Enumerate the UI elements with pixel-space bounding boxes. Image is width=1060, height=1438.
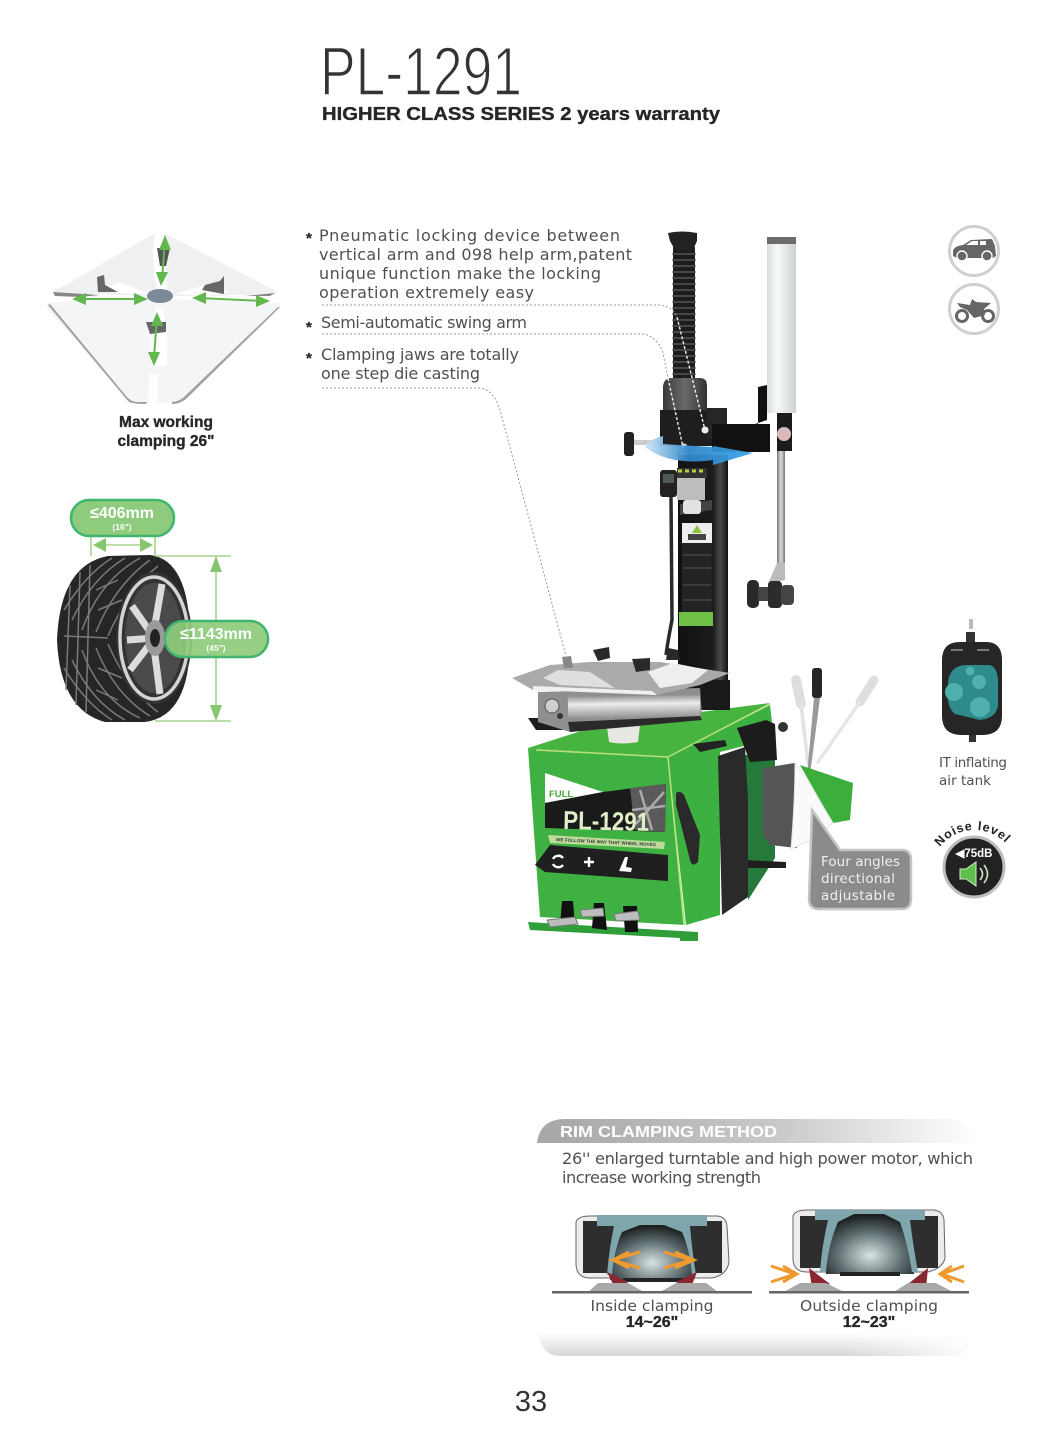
panel: tyre size — [57, 500, 268, 722]
callout: four angles: Four angles — [821, 854, 900, 870]
vertical column — [678, 455, 728, 695]
control panel — [535, 845, 668, 881]
callout: four angles: directional — [821, 871, 895, 887]
feature 2: Semi-automatic swing arm — [321, 313, 527, 332]
feature 3: * — [306, 350, 312, 367]
tank caption: IT inflating — [939, 755, 1007, 771]
panel: max working clamping turntable — [47, 228, 280, 450]
panel header: RIM CLAMPING METHOD — [560, 1124, 777, 1141]
icon: noise level: ◀75dB — [955, 848, 992, 860]
diagram: outside clamping: 12~23" — [843, 1314, 895, 1331]
feature 2: * — [306, 319, 312, 336]
feature 1: * — [306, 230, 312, 247]
tank caption: air tank — [939, 773, 991, 789]
turntable diagram — [47, 228, 280, 404]
tool arm with ghost positions — [763, 668, 874, 849]
clamping jaws — [593, 647, 680, 672]
feature 1: unique function make the locking — [319, 264, 601, 283]
bellows spring and top handle — [668, 232, 697, 382]
panel: rim clamping method — [537, 1119, 977, 1356]
dotted leader lines — [322, 305, 705, 656]
dimension lines — [91, 536, 231, 721]
green cabinet — [528, 703, 786, 941]
front decal: PL-1291 — [563, 805, 650, 837]
panel description: increase working strength — [562, 1168, 761, 1187]
table top — [512, 662, 730, 695]
diagram: inside clamping: 14~26" — [626, 1314, 678, 1331]
caption: Max working — [119, 414, 213, 431]
diagram: outside clamping — [769, 1210, 969, 1331]
subtitle: HIGHER CLASS SERIES 2 years warranty — [322, 104, 720, 124]
turntable — [512, 647, 730, 744]
icon: noise level: Noise level — [934, 821, 1011, 846]
panel header — [537, 1119, 977, 1143]
feature 1: Pneumatic locking device between — [319, 226, 620, 245]
icon: car — [950, 226, 998, 276]
panel: max working clamping turntable: clamping 26" — [118, 433, 214, 450]
feature 3: one step die casting — [321, 364, 480, 383]
panel description: 26'' enlarged turntable and high power motor, which — [562, 1149, 973, 1168]
panel description — [562, 1149, 973, 1187]
white cylinder and rod — [747, 237, 796, 608]
bottom band — [540, 1338, 951, 1356]
cap housing and bracket — [624, 378, 770, 456]
front decal — [545, 773, 666, 849]
side rubber panel and handle — [676, 720, 788, 915]
callout: 406mm: (16") — [112, 522, 132, 532]
tank caption — [939, 755, 1007, 789]
green arrows — [72, 235, 270, 366]
front decal: WE FOLLOW THE WAY THAT WHEEL MOVES — [556, 837, 656, 847]
panel: tyre changer machine — [322, 232, 911, 941]
icon: motorcycle — [950, 284, 998, 334]
diagram: inside clamping — [552, 1215, 752, 1331]
front decal: FULL — [549, 789, 573, 800]
callout: four angles — [809, 810, 911, 909]
callout: 1143mm: (45") — [206, 643, 226, 653]
callout: 1143mm: ≤1143mm — [180, 626, 252, 643]
callout: 406mm: ≤406mm — [90, 505, 154, 522]
blue rotation arrow — [645, 436, 753, 465]
callout: 1143mm — [165, 621, 268, 657]
tyre picture — [57, 555, 192, 722]
feature 1 — [306, 226, 632, 302]
icon: noise level — [934, 821, 1011, 898]
page number: 33 — [515, 1386, 547, 1418]
valve block and gauge — [660, 468, 707, 655]
tank body — [942, 619, 1002, 742]
icon: IT inflating air tank — [939, 619, 1007, 789]
callout: 406mm — [71, 500, 174, 536]
feature 3 — [306, 345, 519, 383]
callout: four angles: adjustable — [821, 888, 895, 904]
foot pedals — [547, 901, 640, 932]
feature list — [306, 226, 632, 383]
diagram: inside clamping: Inside clamping — [590, 1297, 714, 1315]
title: PL-1291 — [320, 33, 522, 110]
diagram: outside clamping: Outside clamping — [800, 1297, 938, 1315]
feature 1: operation extremely easy — [319, 283, 534, 302]
feature 1: vertical arm and 098 help arm,patent — [319, 245, 632, 264]
feature 3: Clamping jaws are totally — [321, 345, 519, 364]
